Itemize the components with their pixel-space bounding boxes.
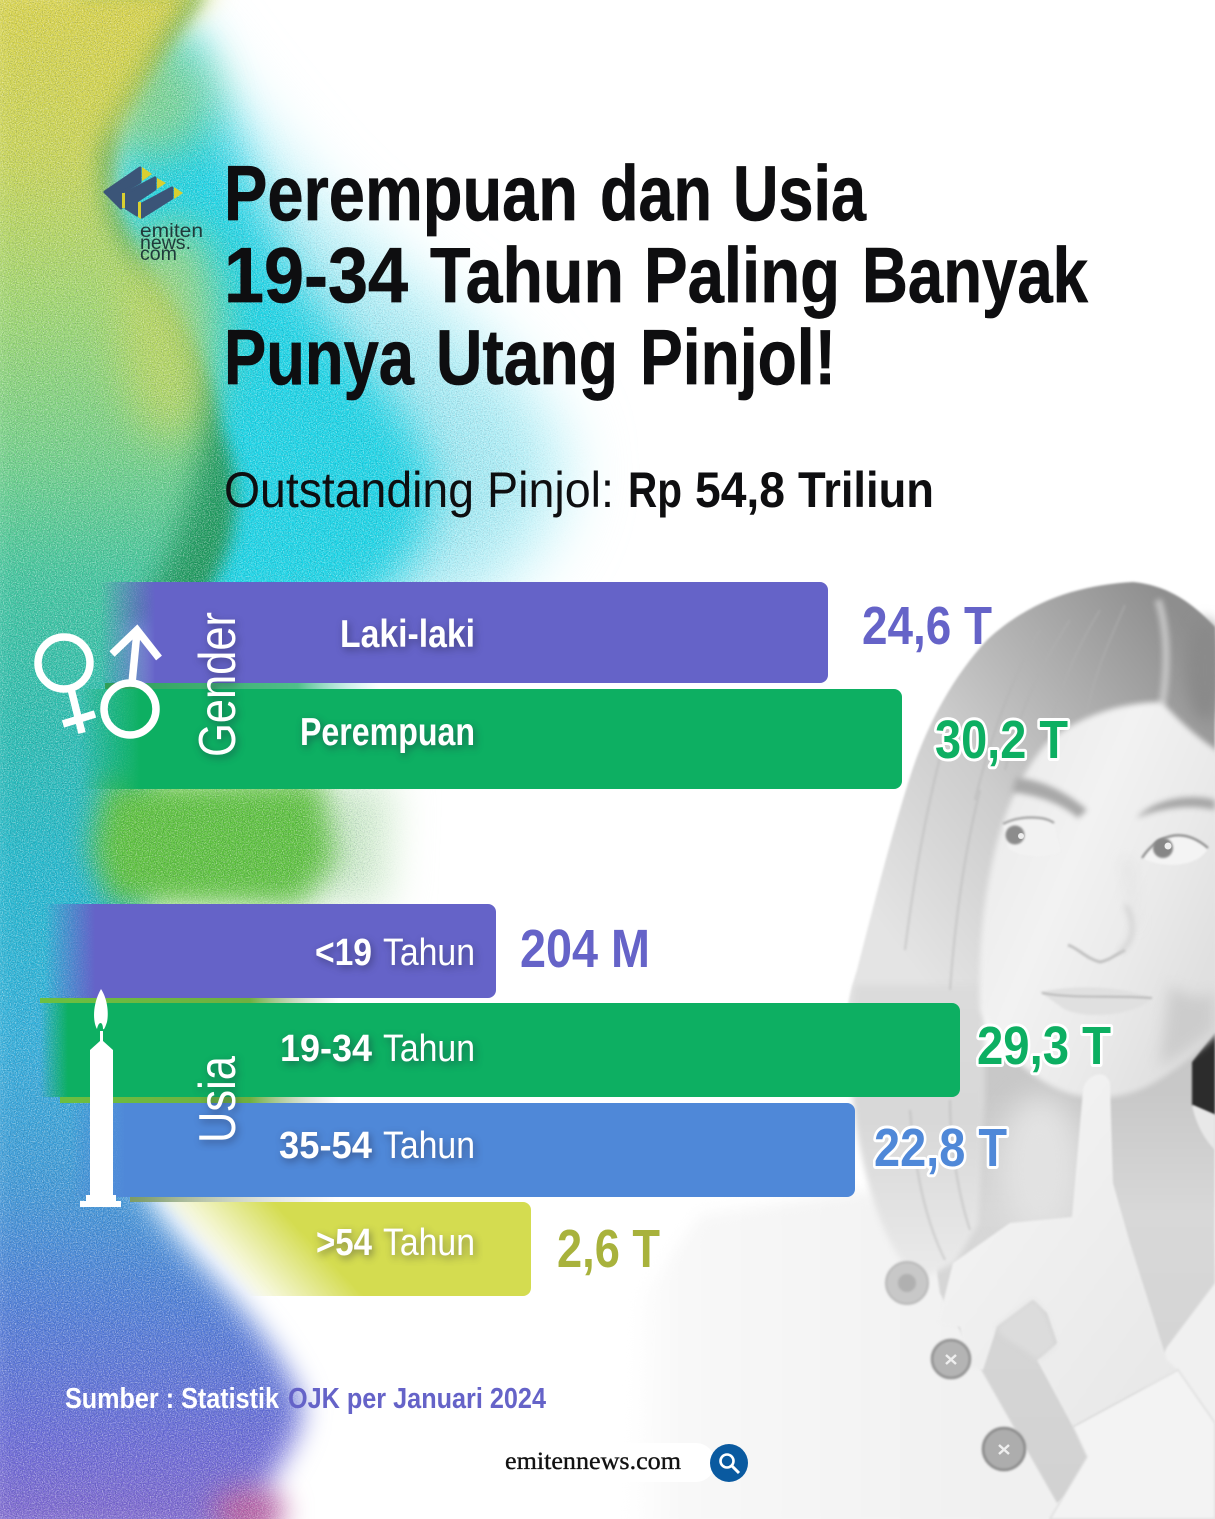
button 1 — [886, 1262, 928, 1304]
title — [224, 149, 1089, 401]
title: Tahun — [430, 231, 624, 319]
subtitle: outstanding total — [224, 462, 934, 518]
bar: 19-34 — [40, 1003, 960, 1097]
subtitle: outstanding total: Pinjol: — [487, 462, 614, 518]
button 2 — [932, 1340, 970, 1378]
website tag — [480, 1443, 748, 1482]
value: over 54: 2,6 T — [557, 1219, 660, 1279]
title: Utang — [436, 313, 618, 401]
photo: thoughtful woman in greyscale — [630, 582, 1215, 1519]
nose — [1068, 945, 1125, 962]
source note: OJK per Januari 2024 — [288, 1383, 546, 1415]
value: 19-34: 29,3 T — [977, 1016, 1111, 1076]
label: under 19 — [315, 932, 475, 974]
bar chart: age — [40, 904, 960, 1296]
label: under 19: <19 — [315, 932, 372, 974]
logo wordmark — [140, 221, 203, 265]
label: over 54: >54 — [316, 1222, 372, 1264]
value: under 19: 204 M — [520, 919, 650, 979]
bar: over 54 — [135, 1202, 531, 1296]
label: 19-34 — [280, 1028, 475, 1070]
label: over 54: Tahun — [383, 1222, 475, 1264]
eyebrows — [1012, 778, 1087, 818]
hair strands — [905, 605, 1125, 1260]
bar: Laki-laki — [100, 582, 828, 683]
hand with raised finger — [938, 1074, 1178, 1427]
bar: Perempuan — [80, 689, 902, 789]
bar values — [520, 596, 1111, 1279]
bar chart: gender — [80, 582, 902, 789]
hair — [848, 582, 1215, 1005]
blouse — [630, 1190, 1215, 1519]
value: Perempuan: 30,2 T — [935, 710, 1068, 770]
jaw and nose side shading — [1125, 860, 1215, 1065]
eyes — [1003, 818, 1060, 856]
logo wordmark: emiten — [140, 221, 203, 242]
title: Banyak — [862, 231, 1089, 319]
section label: Gender: Gender — [189, 612, 247, 757]
hair parting — [1158, 600, 1166, 705]
logo wordmark: news. — [140, 233, 191, 254]
subtitle: outstanding total: Outstanding — [224, 462, 474, 518]
bar labels — [189, 612, 475, 1264]
bar: 35-54 — [70, 1103, 855, 1197]
label: over 54 — [316, 1222, 475, 1264]
logo wordmark: com — [140, 244, 177, 265]
subtitle: outstanding total: Triliun — [798, 462, 934, 518]
label: Perempuan: Perempuan — [300, 711, 475, 754]
button 3 — [983, 1428, 1025, 1470]
title: 19-34 — [224, 231, 408, 319]
label: 19-34: 19-34 — [280, 1028, 372, 1070]
sleeve cuff — [1050, 1370, 1215, 1519]
title: Punya — [224, 313, 415, 401]
dark hair behind neck — [1192, 1032, 1215, 1115]
value: 35-54: 22,8 T — [874, 1118, 1007, 1178]
icon: search — [710, 1444, 748, 1482]
label: 35-54: Tahun — [383, 1125, 475, 1167]
title: Pinjol! — [640, 313, 836, 401]
website tag: emitennews.com — [505, 1448, 682, 1475]
source note: Sumber : Statistik — [65, 1383, 280, 1415]
background colour seen through bar gaps — [40, 683, 380, 1202]
logo: emitennews.com — [105, 167, 203, 265]
bar: under 19 — [45, 904, 496, 998]
label: 19-34: Tahun — [383, 1028, 475, 1070]
subtitle: outstanding total: Rp — [628, 462, 682, 518]
icon: candle — [80, 989, 121, 1207]
value: Laki-laki: 24,6 T — [862, 596, 992, 656]
label: 35-54: 35-54 — [279, 1125, 372, 1167]
lips — [1040, 987, 1152, 1015]
title: Perempuan — [224, 149, 578, 237]
title: Paling — [644, 231, 840, 319]
label: Laki-laki: Laki-laki — [340, 613, 475, 656]
label: 35-54 — [279, 1125, 475, 1167]
section label: Usia: Usia — [189, 1056, 247, 1143]
subtitle: outstanding total: 54,8 — [695, 462, 785, 518]
source note — [65, 1383, 546, 1415]
label: under 19: Tahun — [383, 932, 475, 974]
title: Usia — [733, 149, 866, 237]
icon: gender symbols — [38, 630, 159, 735]
background: grainy colour gradient — [0, 0, 560, 1519]
face — [980, 702, 1215, 1098]
title: dan — [600, 149, 712, 237]
neck and chest — [928, 1020, 1215, 1503]
